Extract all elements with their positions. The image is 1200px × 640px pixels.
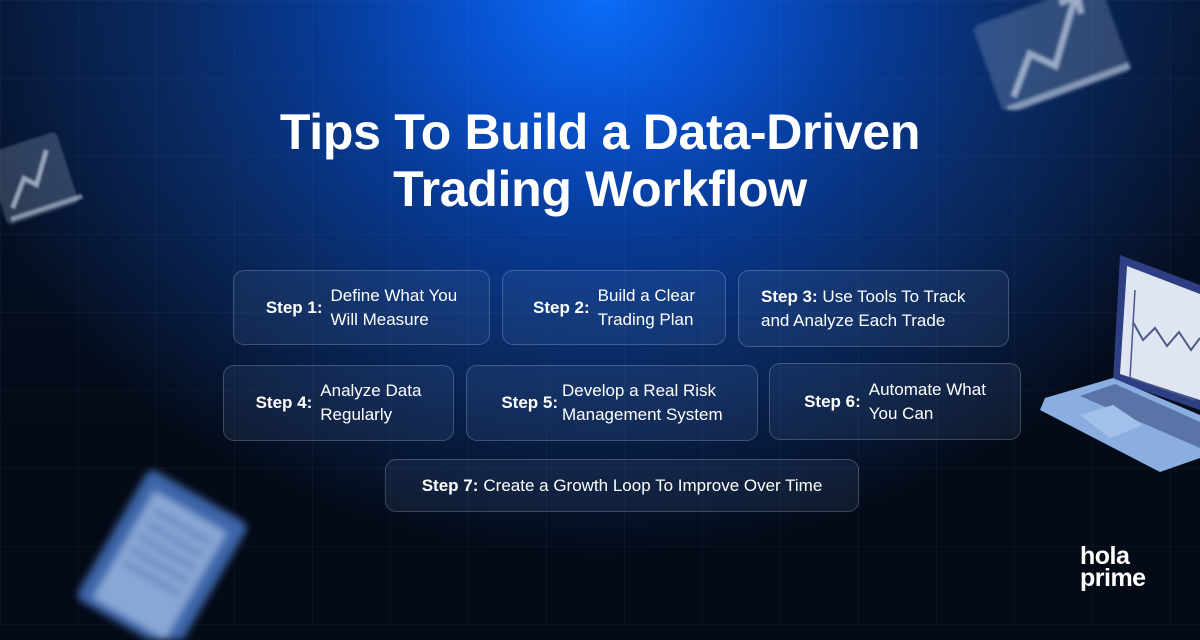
box: step 6: Step 6: (804, 392, 861, 410)
box: step 7 (385, 459, 859, 512)
box: step 5: Management System (562, 405, 723, 424)
title (280, 104, 920, 217)
box: step 1: Will Measure (331, 310, 429, 328)
box: step 3 (738, 270, 1009, 347)
box: step 7: Step 7: (422, 476, 478, 494)
box: step 6 (769, 363, 1021, 440)
title: Tips To Build a Data-Driven (280, 104, 920, 160)
icon: laptop right (1040, 255, 1200, 472)
logo: prime (1080, 564, 1146, 592)
box: step 4: Regularly (320, 405, 392, 424)
icon: chart card left (0, 132, 84, 225)
box: step 4: Step 4: (256, 393, 312, 412)
box: step 3: and Analyze Each Trade (761, 310, 945, 330)
box: step 1: Step 1: (266, 298, 323, 316)
box: step 5: Step 5: (501, 393, 558, 412)
box: step 4: Analyze Data (320, 381, 421, 400)
box: step 1 (233, 270, 490, 345)
logo (1080, 542, 1146, 592)
box: step 2: Build a Clear (598, 286, 695, 304)
box: step 5: Develop a Real Risk (562, 381, 716, 400)
box: step 3: Step 3: Use Tools To Track (761, 286, 965, 306)
box: step 6: Automate What (869, 380, 986, 398)
logo: hola (1080, 542, 1129, 570)
box: step 5 (466, 365, 758, 441)
box: step 7: Create a Growth Loop To Improve Over Time (483, 476, 822, 494)
box: step 1: Define What You (331, 286, 457, 304)
title: Trading Workflow (393, 161, 807, 217)
icon: chart card top right (972, 0, 1132, 112)
box: step 2: Trading Plan (598, 310, 693, 328)
box: step 4 (223, 365, 454, 441)
box: step 2: Step 2: (533, 298, 590, 316)
box: step 2 (502, 270, 726, 345)
box: step 6: You Can (869, 404, 933, 422)
icon: document bottom left (72, 466, 252, 640)
